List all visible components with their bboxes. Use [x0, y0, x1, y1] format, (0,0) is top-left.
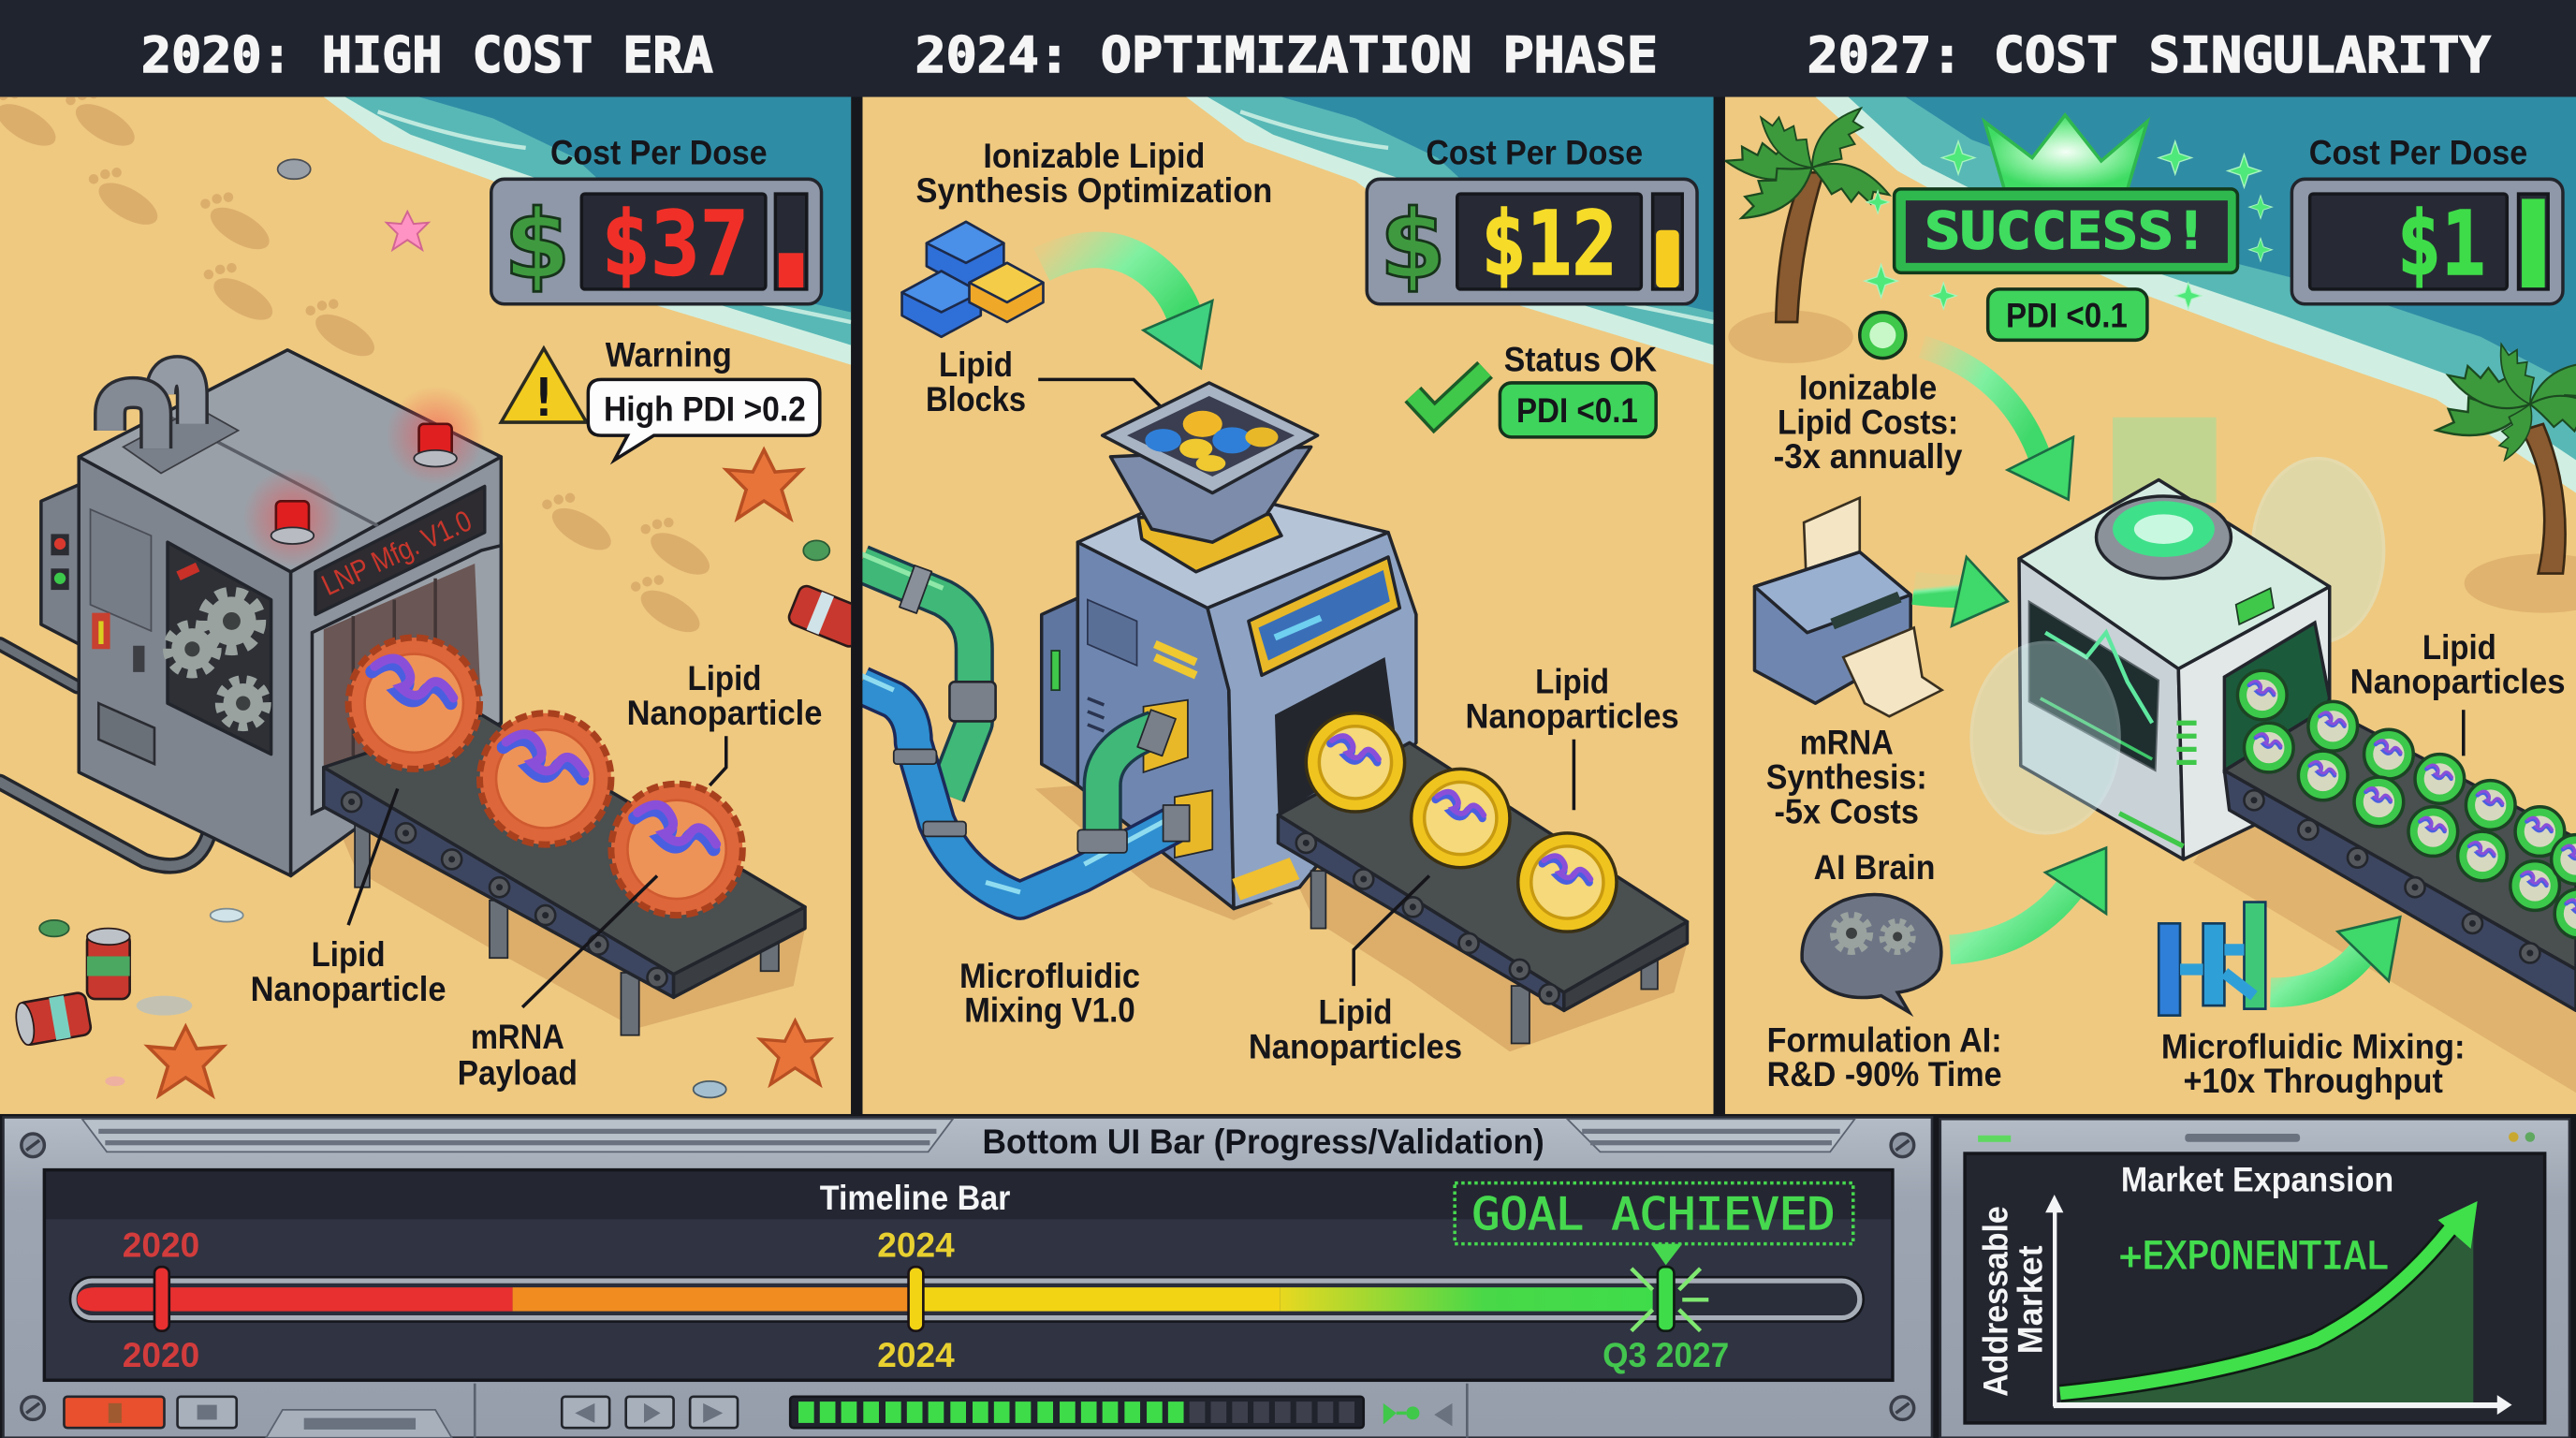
- goal pointer: [1651, 1244, 1682, 1265]
- label: status ok: Status OK: [1504, 341, 1657, 379]
- status screen: [1249, 557, 1399, 675]
- panel: timeline console: [4, 1117, 1932, 1438]
- shield back: [2252, 459, 2384, 642]
- beach debris: [39, 159, 830, 1097]
- year labels bottom: 2020: [123, 1336, 199, 1374]
- success banner: [1895, 189, 2237, 272]
- marker 2020: [154, 1267, 169, 1331]
- label: lipid nanoparticles bottom: Nanoparticles: [1249, 1027, 1462, 1065]
- warning mark: !: [528, 368, 560, 429]
- label: formulation AI: R&D -90% Time: [1767, 1055, 2002, 1093]
- palm tree right: [2432, 338, 2576, 574]
- cost meter 2020: [491, 134, 822, 304]
- lipid blocks icon: [902, 222, 1043, 337]
- header bar: [0, 0, 2576, 97]
- cost meter 2024: $12: [1481, 193, 1617, 296]
- label: mRNA payload: Payload: [458, 1053, 578, 1092]
- cost meter 2020: $37: [601, 193, 749, 296]
- cost meter 2027: $1: [2397, 193, 2485, 296]
- label: formulation AI: Formulation AI:: [1767, 1020, 2002, 1059]
- conveyor belt: [1278, 742, 1687, 1043]
- top vent left: [82, 1119, 953, 1152]
- pill: PDI below 0.1: PDI <0.1: [2006, 296, 2128, 334]
- label: lipid blocks: Blocks: [926, 380, 1026, 418]
- panel: 2020 high cost era: [0, 89, 869, 1114]
- exponential label: +EXPONENTIAL: [2119, 1234, 2389, 1278]
- arrow: mRNA synthesis: [1914, 557, 2008, 626]
- label: ionizable lipid costs: Lipid Costs:: [1778, 403, 1958, 441]
- leader line: [2463, 710, 2465, 756]
- label: lipid nanoparticle right: Lipid: [688, 659, 761, 697]
- label: mRNA payload: [459, 1024, 576, 1092]
- sand background: [0, 97, 851, 1114]
- light beam: [2113, 418, 2217, 503]
- label: ionizable lipid costs: -3x annually: [1774, 437, 1963, 476]
- water: [1815, 97, 2576, 493]
- footprints: [0, 89, 716, 640]
- conveyor shadow: [1278, 843, 1687, 1051]
- label: lipid nanoparticles: [2350, 628, 2566, 701]
- cost meter 2027: Cost Per Dose: [2309, 134, 2527, 172]
- sand shadows: [1728, 311, 2576, 1093]
- label: lipid nanoparticles bottom: Lipid: [1318, 992, 1392, 1031]
- year labels top: 2020: [123, 1226, 199, 1265]
- timeline screen: [44, 1170, 1893, 1380]
- glowing top button: [2097, 496, 2231, 579]
- lipid nanoparticles: [2237, 670, 2576, 938]
- leader line: blocks: [1038, 379, 1168, 414]
- y axis label: [1977, 1206, 2050, 1397]
- status check fill: [1412, 370, 1486, 418]
- sand background: [862, 97, 1714, 1114]
- cost meter 2020: Cost Per Dose: [550, 134, 768, 172]
- panel dividers: [475, 1384, 1467, 1438]
- lipid nanoparticles: [1306, 713, 1617, 932]
- title: 2020 high cost era: 2020: HIGH COST ERA: [141, 27, 713, 84]
- marker 2024: [909, 1267, 923, 1331]
- success banner: SUCCESS!: [1925, 201, 2209, 260]
- marker Q3 2027: [1658, 1267, 1674, 1331]
- machine body: [79, 350, 501, 875]
- label: lipid nanoparticle left: Nanoparticle: [251, 970, 446, 1008]
- machine: side box: [41, 485, 79, 644]
- warning icon: [501, 348, 587, 422]
- shield front: [1971, 642, 2119, 833]
- status check icon: [1412, 370, 1486, 418]
- label: lipid blocks: Lipid: [939, 345, 1013, 384]
- y axis label: Market: [2012, 1245, 2050, 1354]
- market frame: [1940, 1119, 2569, 1438]
- year labels top: [123, 1226, 955, 1265]
- arrow: lipid costs: [1922, 346, 2073, 500]
- label: lipid nanoparticle left: Lipid: [312, 935, 386, 974]
- label: mRNA synthesis: [1766, 724, 1927, 830]
- label: microfluidic mixing: Microfluidic Mixing:: [2161, 1027, 2466, 1065]
- cost meter 2024: Cost Per Dose: [1426, 134, 1643, 172]
- label: microfluidic mixing: Microfluidic: [959, 957, 1140, 995]
- area under curve: [2060, 1225, 2473, 1403]
- microfluidic chip icon: [2159, 902, 2265, 1016]
- label: lipid nanoparticles: Nanoparticles: [2350, 663, 2566, 701]
- label: lipid nanoparticle left: [251, 935, 446, 1008]
- screws: [22, 1134, 1914, 1419]
- label: microfluidic mixing: [2161, 1027, 2466, 1100]
- label: ionizable lipid synthesis: [915, 137, 1272, 210]
- label: lipid nanoparticles right: Nanoparticles: [1466, 697, 1679, 736]
- progress meter: [790, 1397, 1364, 1428]
- machine door: [2224, 623, 2330, 770]
- machine shadow: [1035, 785, 1273, 920]
- arrow: lipid blocks to hopper: [1042, 250, 1212, 368]
- cost meter 2024: [1367, 134, 1697, 304]
- pill: PDI below 0.1: PDI <0.1: [1516, 391, 1638, 430]
- machine body: [2019, 479, 2330, 859]
- arrow: AI brain: [1950, 848, 2106, 949]
- panel: market expansion: [1940, 1119, 2569, 1438]
- pill: PDI below 0.1: [1500, 383, 1656, 437]
- growth curve: [2060, 1201, 2478, 1393]
- AI brain icon: [1802, 895, 1941, 1012]
- conveyor door: [1275, 657, 1397, 815]
- microfluidic pipes: [861, 553, 1190, 901]
- chart axes: [2045, 1195, 2512, 1415]
- year labels top: 2024: [877, 1226, 955, 1265]
- leader lines: [348, 736, 726, 1007]
- machine sign: LNP Mfg. V1.0: [316, 504, 476, 602]
- label: lipid nanoparticles: Lipid: [2422, 628, 2496, 667]
- hopper: [1103, 383, 1318, 572]
- label: microfluidic mixing: Mixing V1.0: [964, 991, 1135, 1030]
- soda cans: [13, 583, 869, 1047]
- pill: PDI below 0.1: [1988, 289, 2147, 340]
- label: AI brain: AI Brain: [1814, 848, 1936, 887]
- label: microfluidic mixing: [959, 957, 1140, 1030]
- year labels bottom: Q3 2027: [1603, 1336, 1729, 1374]
- power cables: [0, 644, 218, 866]
- market screen: [1965, 1153, 2545, 1423]
- rooftop pipes: [110, 372, 238, 473]
- leader lines: [1354, 740, 1573, 986]
- timeline bar track: [69, 1276, 1865, 1323]
- machine door: [312, 546, 501, 814]
- gear window: [168, 542, 271, 755]
- label: microfluidic mixing: +10x Throughput: [2184, 1062, 2443, 1100]
- title: 2027 cost singularity: 2027: COST SINGULARITY: [1808, 27, 2491, 84]
- callout: high PDI: High PDI >0.2: [604, 389, 806, 428]
- conveyor belt: [2224, 708, 2576, 1010]
- panel: 2027 cost singularity: [1723, 97, 2576, 1114]
- label: lipid nanoparticles right: [1466, 663, 1679, 736]
- label: formulation AI: [1767, 1020, 2002, 1093]
- palm tree left: [1723, 102, 1894, 322]
- goal achieved box: GOAL ACHIEVED: [1472, 1189, 1835, 1240]
- window accents: [1978, 1132, 2535, 1142]
- alarm button right: [393, 391, 481, 477]
- label: lipid nanoparticles right: Lipid: [1535, 663, 1609, 701]
- sand background: [1725, 97, 2576, 1114]
- label: lipid blocks: [926, 345, 1026, 418]
- console frame: [4, 1117, 1932, 1438]
- title: 2024 optimization phase: 2024: OPTIMIZATION PHASE: [915, 27, 1658, 84]
- arrow: microfluidic mixing: [2271, 917, 2400, 992]
- goal sparks: [1632, 1269, 1708, 1331]
- label: lipid nanoparticle right: [627, 659, 822, 732]
- label: ionizable lipid costs: Ionizable: [1799, 368, 1937, 406]
- cost meter 2027: [2291, 134, 2563, 304]
- panel: 2024 optimization phase: [861, 97, 1714, 1114]
- label: ionizable lipid synthesis: Synthesis Optimization: [915, 171, 1272, 210]
- label: mRNA payload: mRNA: [471, 1018, 564, 1056]
- console title: Bottom UI Bar (Progress/Validation): [983, 1123, 1544, 1161]
- success starburst: [1984, 115, 2147, 189]
- label: mRNA synthesis: mRNA: [1800, 724, 1894, 762]
- volume icon: [1383, 1403, 1453, 1426]
- conveyor belt: [324, 714, 805, 1035]
- year labels bottom: 2024: [877, 1336, 955, 1374]
- label: mRNA synthesis: -5x Costs: [1775, 792, 1919, 830]
- callout: high PDI: [588, 379, 820, 460]
- label: mRNA synthesis: Synthesis:: [1766, 757, 1927, 796]
- conveyor shadow: [343, 831, 805, 1028]
- label: ionizable lipid costs: [1774, 368, 1963, 476]
- timeline bar fill: [77, 1287, 1653, 1312]
- sparkles: [1865, 141, 2272, 309]
- tray: [266, 1410, 452, 1438]
- port fittings: [1144, 700, 1212, 858]
- y axis label: Addressable: [1977, 1206, 2015, 1397]
- label: ionizable lipid synthesis: Ionizable Lipid: [983, 137, 1205, 175]
- water: [1186, 97, 1714, 365]
- machine side box: [1042, 598, 1077, 785]
- water: [324, 97, 851, 365]
- year labels bottom: [123, 1336, 1729, 1374]
- label: lipid nanoparticle right: Nanoparticle: [627, 694, 822, 732]
- control buttons: [64, 1397, 738, 1428]
- alarm button left: [250, 474, 335, 562]
- lipid ring icon: [1860, 312, 1906, 359]
- machine body: [1051, 487, 1416, 909]
- top vent right: [1567, 1119, 1855, 1152]
- market title: Market Expansion: [2121, 1160, 2393, 1198]
- printer icon: [1754, 498, 1942, 716]
- machine: status lights: [51, 534, 69, 590]
- label: timeline bar: Timeline Bar: [820, 1179, 1010, 1217]
- lipid nanoparticles: [348, 638, 742, 916]
- warning label: Warning: [606, 335, 732, 374]
- label: lipid nanoparticles bottom: [1249, 992, 1462, 1065]
